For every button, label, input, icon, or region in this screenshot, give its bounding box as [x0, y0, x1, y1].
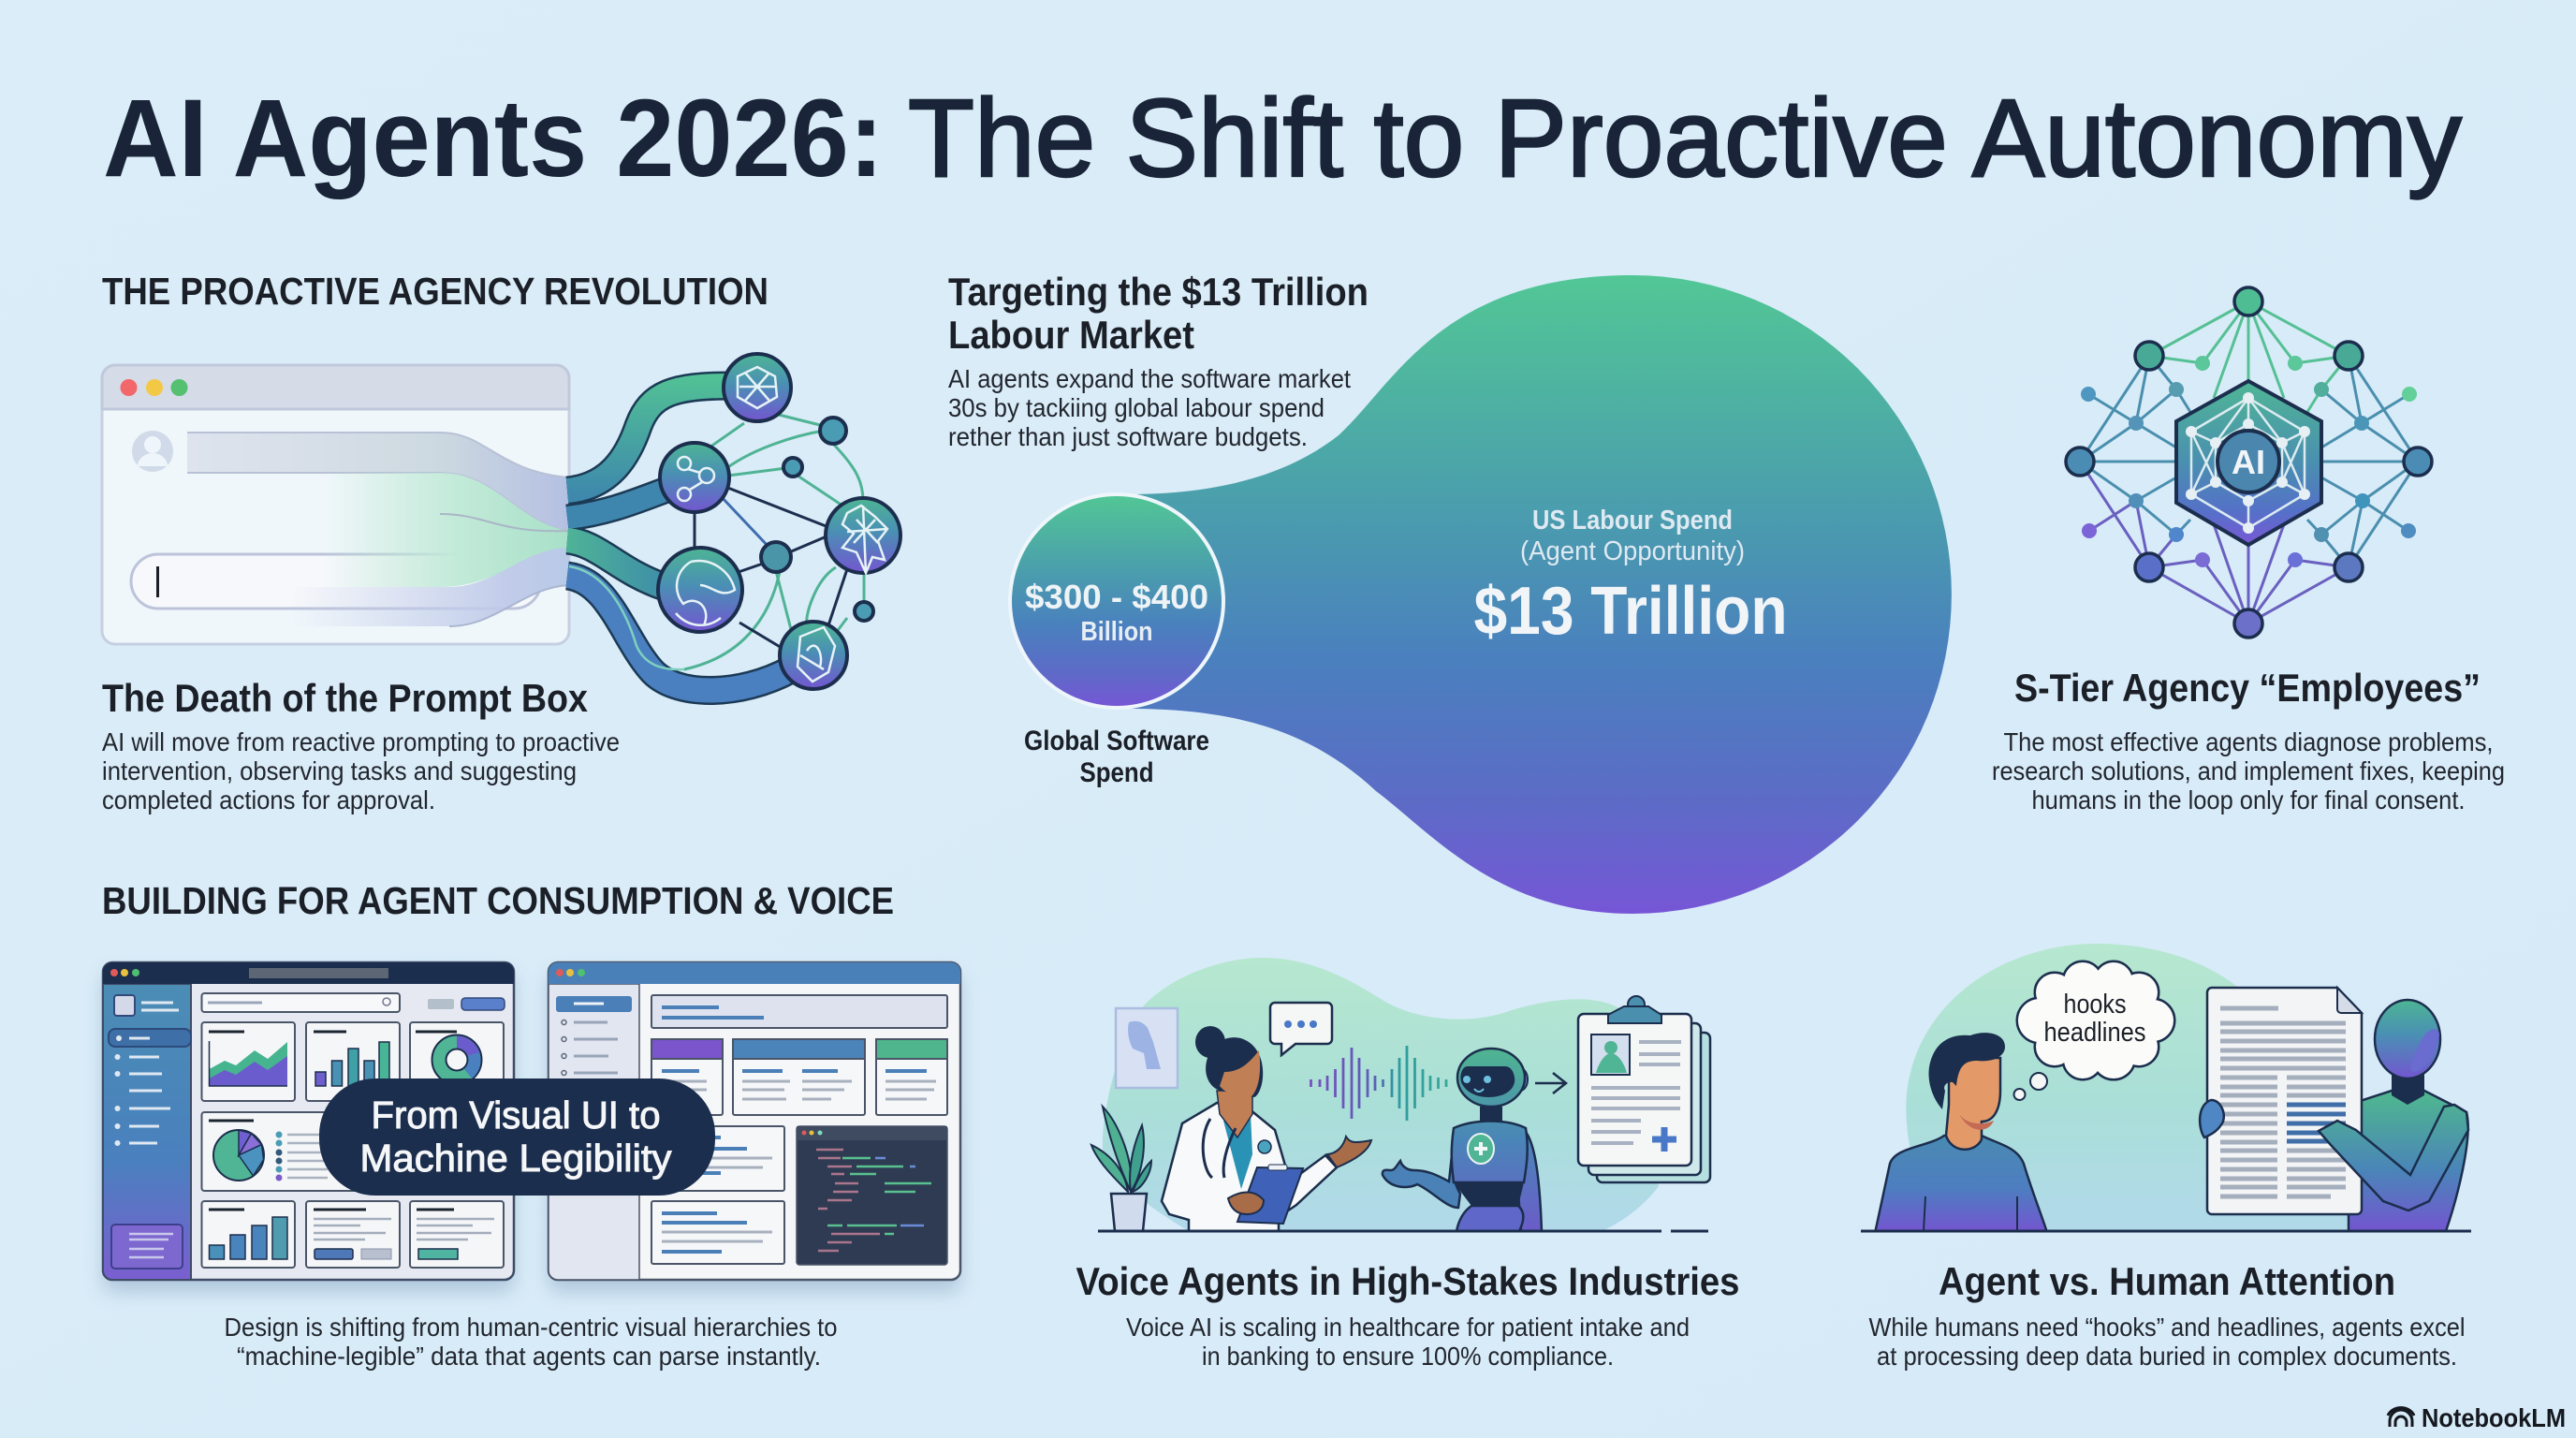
label: global software spend [1024, 726, 1209, 788]
large bubble: us labour spend: (Agent Opportunity) [1520, 536, 1745, 566]
text: agent vs human attention: at processing deep data buried in complex documents. [1877, 1342, 2457, 1371]
text: agent vs human attention: Agent vs. Human Attention [1939, 1259, 2395, 1303]
large bubble: us labour spend: US Labour Spend [1532, 506, 1733, 536]
sound waveform [1310, 1046, 1446, 1121]
right machine-legible window [549, 962, 960, 1292]
heading: the proactive agency revolution: THE PROACTIVE AGENCY REVOLUTION [102, 270, 768, 313]
text: agent vs human attention [1868, 1259, 2466, 1371]
title: AI Agents 2026: [103, 77, 884, 200]
flow ribbons to nodes [567, 386, 791, 691]
text: targeting the 13 trillion labour market: Labour Market [948, 313, 1194, 357]
hexagon core [2176, 381, 2321, 545]
text: targeting the 13 trillion labour market: AI agents expand the software market [948, 364, 1351, 393]
text: targeting the 13 trillion labour market: rether than just software budgets. [948, 422, 1308, 451]
document [2207, 988, 2362, 1214]
text: design caption [225, 1313, 837, 1371]
label: global software spend: Global Software [1024, 726, 1209, 756]
patient clipboard [1578, 996, 1710, 1182]
label: global software spend: Spend [1080, 757, 1153, 788]
text: s-tier agency employees: research solutions, and implement fixes, keeping [1992, 756, 2505, 785]
small nodes [2081, 356, 2417, 567]
thought bubble: hooks [2063, 990, 2127, 1020]
icon: ai hexagon network [2066, 287, 2432, 638]
hexagon core: AI [2232, 443, 2265, 481]
text: targeting the 13 trillion labour market: 30s by tackiing global labour spend [948, 393, 1325, 422]
network edges [2080, 301, 2418, 624]
pill: from visual ui to machine legibility [319, 1078, 715, 1196]
text: the death of the prompt box: intervention, observing tasks and suggesting [102, 756, 577, 785]
text: voice agents: in banking to ensure 100% compliance. [1202, 1342, 1614, 1371]
ground line [1098, 1230, 1708, 1232]
network nodes with icons [658, 354, 900, 689]
large bubble: us labour spend [1128, 275, 1952, 914]
browser window [102, 365, 569, 644]
text: voice agents: Voice AI is scaling in healthcare for patient intake and [1126, 1313, 1690, 1342]
small bubble: global software spend: $300 - $400 [1025, 578, 1208, 616]
panel: agent vs human illustration [1861, 944, 2471, 1231]
large bubble: us labour spend: $13 Trillion [1473, 574, 1788, 649]
text: s-tier agency employees: S-Tier Agency “Employees” [2014, 666, 2481, 710]
chart: market size funnel [1010, 275, 1952, 914]
text: targeting the 13 trillion labour market: Targeting the $13 Trillion [948, 270, 1368, 314]
text: agent vs human attention: While humans need “hooks” and headlines, agents excel [1868, 1313, 2466, 1342]
doctor figure [1162, 1026, 1371, 1231]
text: the death of the prompt box [102, 676, 620, 814]
small bubble: global software spend: Billion [1080, 617, 1153, 647]
robot figure holding paper [2349, 1000, 2468, 1231]
title [103, 77, 2462, 200]
pill: from visual ui to machine legibility: Machine Legibility [359, 1137, 672, 1180]
small bubble: global software spend [1010, 494, 1223, 708]
text: targeting the 13 trillion labour market [948, 270, 1368, 451]
text: voice agents [1076, 1259, 1739, 1371]
text: s-tier agency employees [1992, 666, 2505, 814]
arrow [1535, 1073, 1566, 1093]
panel: voice agents illustration [1091, 958, 1710, 1231]
thought bubble [2014, 962, 2174, 1100]
title: The Shift to Proactive Autonomy [908, 77, 2462, 200]
text: s-tier agency employees: The most effective agents diagnose problems, [2003, 727, 2494, 756]
text: the death of the prompt box: completed actions for approval. [102, 785, 435, 814]
left dashboard window [103, 962, 514, 1292]
human figure [1876, 1033, 2046, 1231]
network connections [684, 412, 864, 669]
outer nodes [2066, 287, 2432, 638]
text: the death of the prompt box: The Death of the Prompt Box [102, 676, 589, 720]
panel: dashboard to machine legibility [103, 962, 960, 1292]
robot arm and hand [2200, 1100, 2468, 1211]
text: s-tier agency employees: humans in the loop only for final consent. [2031, 785, 2466, 814]
text: design caption: Design is shifting from human-centric visual hierarchies to [225, 1313, 837, 1342]
background blob [1103, 958, 1659, 1231]
robot figure [1383, 1049, 1542, 1231]
pill: from visual ui to machine legibility: From Visual UI to [371, 1093, 661, 1137]
notebooklm logo: NotebookLM [2422, 1403, 2566, 1432]
wall picture [1116, 1008, 1178, 1088]
plant [1091, 1107, 1151, 1231]
text: the death of the prompt box: AI will move from reactive prompting to proactive [102, 727, 620, 756]
text: voice agents: Voice Agents in High-Stakes Industries [1076, 1259, 1739, 1303]
panel: death of the prompt box illustration [102, 354, 900, 691]
speech bubble [1270, 1003, 1332, 1055]
thought bubble: headlines [2044, 1018, 2145, 1048]
ground line [1861, 1230, 2471, 1232]
heading: building for agent consumption and voice: BUILDING FOR AGENT CONSUMPTION & VOICE [102, 879, 894, 922]
flow ribbons inside window [187, 433, 569, 626]
text: design caption: “machine-legible” data that agents can parse instantly. [237, 1342, 821, 1371]
background blob [1906, 944, 2349, 1231]
